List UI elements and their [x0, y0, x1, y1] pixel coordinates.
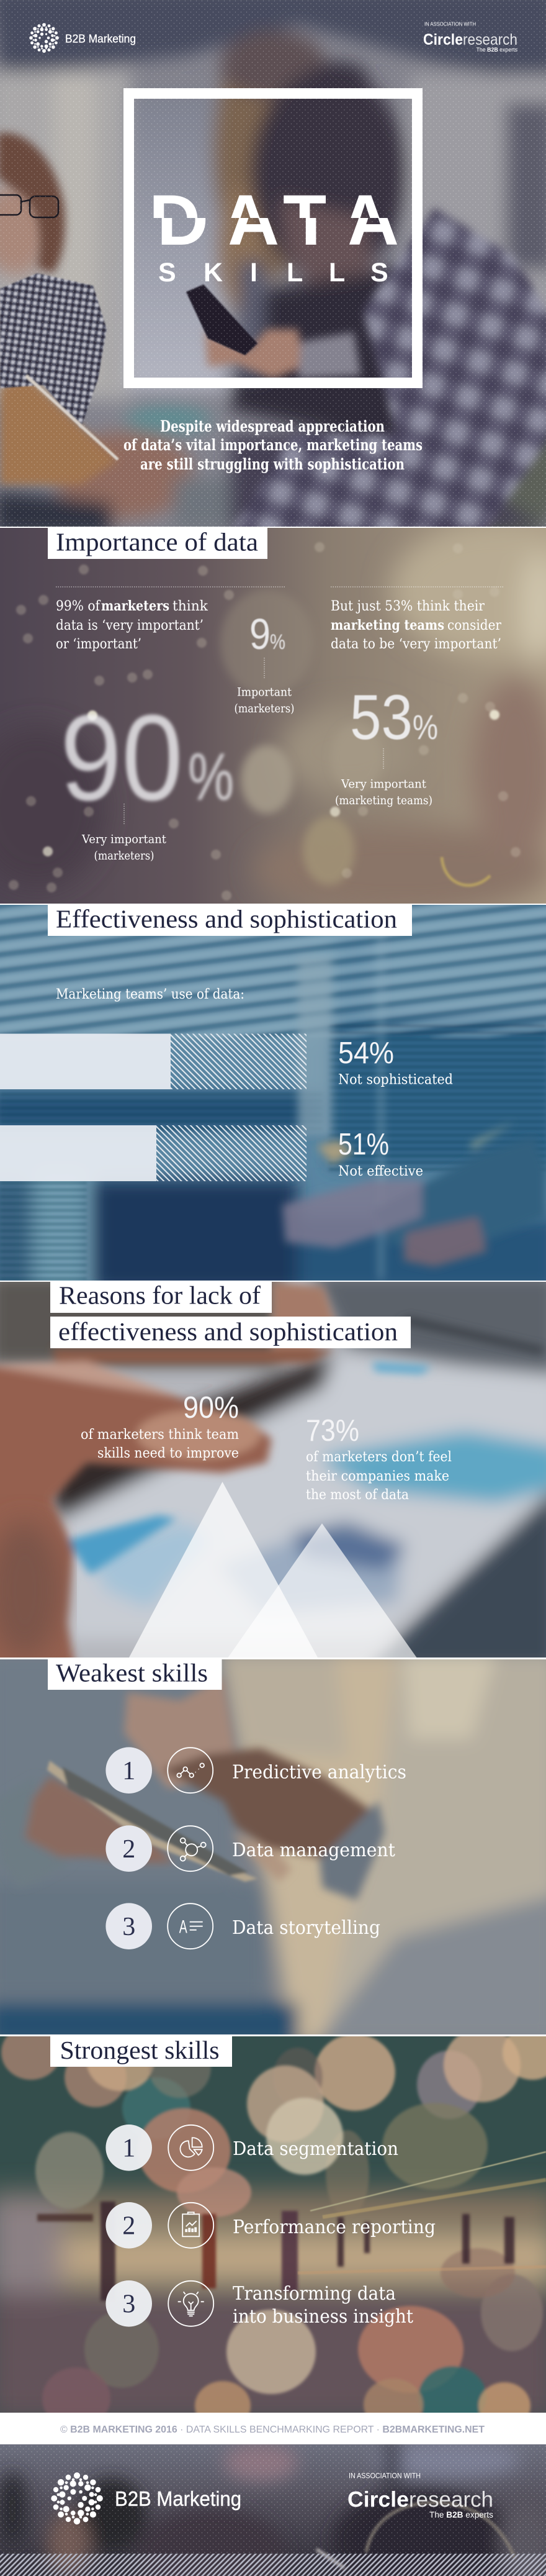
- skill 2: performance reporting: [105, 2202, 436, 2249]
- stat: 53% very important: [335, 682, 438, 807]
- skill 2: performance reporting: Performance reporting: [233, 2216, 436, 2238]
- text: marketing teams: But just 53% think their: [331, 599, 485, 614]
- skill 1: predictive analytics: Predictive analytics: [232, 1761, 406, 1784]
- stat: 9% important: [235, 610, 294, 715]
- finger and tablet background: [0, 1273, 546, 1671]
- intro text: are still struggling with sophistication: [140, 455, 405, 473]
- blinds background: [0, 894, 546, 1292]
- icon: network nodes: [181, 1838, 206, 1861]
- panel: reasons for lack of effectiveness and sophistication: [0, 1273, 546, 1671]
- stat: 73% of marketers: of marketers don’t feel: [306, 1449, 452, 1465]
- heading: Reasons for lack of: [59, 1281, 261, 1309]
- copyright strip: [0, 2413, 546, 2444]
- skill 3: transforming data: 3: [122, 2290, 135, 2319]
- stat: 90% very important: [60, 689, 234, 863]
- stat: 73% of marketers: [306, 1414, 452, 1503]
- stat: 90% very important: Very important: [81, 832, 166, 846]
- heading: Strongest skills: [60, 2036, 220, 2064]
- footer logo: Circle Research: [347, 2472, 493, 2519]
- skill 3: data storytelling: 3: [122, 1913, 135, 1941]
- text: marketing teams: marketing teams: [331, 617, 444, 633]
- skill 2: data management: Data management: [232, 1839, 395, 1861]
- heading: [50, 1281, 411, 1348]
- logo: B2B Marketing: [29, 23, 136, 53]
- bokeh background: [0, 522, 546, 913]
- text: marketers: marketers: [101, 598, 169, 614]
- skill 1: data segmentation: [105, 2125, 398, 2171]
- stat: 53% very important: 53: [350, 682, 413, 753]
- logo: Circle Research: IN ASSOCIATION WITH: [424, 21, 476, 27]
- text: marketers: or ‘important’: [56, 637, 141, 652]
- icon: clipboard chart: [182, 2212, 199, 2236]
- intro text: Despite widespread appreciation: [160, 417, 385, 435]
- stat: 90% of marketers: 90%: [183, 1391, 239, 1425]
- audience background: [0, 2441, 546, 2576]
- stat: 90% very important: (marketers): [94, 849, 154, 863]
- icon: light bulb: [178, 2292, 204, 2316]
- title: DATA: DATA: [149, 181, 391, 260]
- footer logo: B2B Marketing: [51, 2472, 241, 2524]
- stripe band: [0, 2554, 546, 2576]
- footer logo: Circle Research: The B2B experts: [429, 2510, 493, 2519]
- panel: strongest skills: [0, 2025, 546, 2431]
- skill 1: predictive analytics: 1: [122, 1757, 135, 1785]
- icon: text lines: A: [179, 1917, 187, 1938]
- logo: B2B Marketing: B2B Marketing: [65, 32, 136, 45]
- stat: 9% important: Important: [237, 686, 292, 699]
- stat: 90% very important: 90: [60, 689, 183, 826]
- skill 3: transforming data: into business insight: [233, 2306, 413, 2328]
- heading: Importance of data: [56, 528, 258, 556]
- stat: 73% of marketers: the most of data: [306, 1487, 409, 1503]
- skill 2: data management: 2: [122, 1835, 135, 1864]
- text: marketing teams: [331, 587, 504, 652]
- panel: weakest skills: [0, 1652, 546, 2046]
- panel: importance of data: [0, 522, 546, 913]
- panel: effectiveness and sophistication: [0, 894, 546, 1292]
- hands and tablet background: [0, 1652, 546, 2046]
- skill 1: data segmentation: 1: [122, 2134, 135, 2162]
- bar: not sophisticated: Not sophisticated: [338, 1072, 453, 1088]
- skill 1: predictive analytics: [105, 1747, 406, 1794]
- stat: 53% very important: (marketing teams): [335, 794, 432, 807]
- stat: 9% important: %: [270, 630, 285, 654]
- stat: 53% very important: %: [413, 707, 438, 746]
- footer logo: Circle Research: IN ASSOCIATION WITH: [349, 2472, 421, 2480]
- bar: not effective: Not effective: [338, 1164, 423, 1179]
- text: marketers: 99% of: [56, 599, 101, 614]
- footer logo: Circle Research: Circle: [347, 2488, 409, 2511]
- intro text: of data’s vital importance, marketing teams: [123, 436, 423, 454]
- stat: 9% important: 9: [249, 610, 271, 658]
- title: SKILLS: SKILLS: [158, 258, 388, 288]
- footer logo: Circle Research: research: [409, 2488, 493, 2511]
- text: marketers: think: [172, 599, 208, 614]
- icon: pie chart: [180, 2138, 202, 2157]
- stat: 53% very important: Very important: [341, 778, 426, 791]
- stat: 73% of marketers: their companies make: [306, 1469, 449, 1484]
- stat: 90% of marketers: [81, 1391, 239, 1461]
- intro text: [123, 417, 423, 473]
- title: DATA: DATA: [157, 181, 399, 260]
- bar: not effective: 51%: [338, 1128, 389, 1161]
- skill 3: data storytelling: [105, 1903, 380, 1949]
- stat: 90% of marketers: skills need to improve: [97, 1446, 239, 1461]
- triangle chart: [129, 1482, 417, 1658]
- bar: not sophisticated: 54%: [338, 1036, 394, 1070]
- stat: 9% important: (marketers): [235, 702, 294, 715]
- icon: predictive line: [177, 1763, 204, 1777]
- stat: 90% of marketers: of marketers think team: [81, 1427, 239, 1443]
- skill 3: transforming data: [105, 2280, 413, 2328]
- logo: Circle Research: research: [463, 31, 517, 48]
- heading: effectiveness and sophistication: [58, 1317, 398, 1346]
- hero background photo: [0, 0, 546, 553]
- panel: footer: [0, 2441, 546, 2576]
- bar: not sophisticated: [0, 1033, 453, 1089]
- logo: Circle Research: The B2B experts: [477, 47, 517, 53]
- heading: Weakest skills: [56, 1658, 208, 1687]
- icon: text lines: [179, 1917, 203, 1938]
- text: marketing teams: data to be ‘very important’: [331, 637, 501, 652]
- logo: Circle Research: Circle: [423, 31, 463, 48]
- stat: 90% very important: %: [188, 739, 234, 814]
- skill 2: data management: [105, 1825, 395, 1872]
- skill 3: transforming data: Transforming data: [233, 2283, 396, 2305]
- text: marketing teams: consider: [447, 618, 501, 633]
- heading: Effectiveness and sophistication: [56, 904, 397, 933]
- text: marketers: data is ‘very important’: [56, 618, 204, 633]
- bar: not effective: [0, 1125, 423, 1181]
- title frame: [129, 93, 417, 383]
- stat: 73% of marketers: 73%: [306, 1414, 359, 1448]
- skill 3: data storytelling: Data storytelling: [232, 1917, 380, 1939]
- logo: Circle Research: [423, 21, 517, 53]
- panel: hero: [0, 0, 546, 553]
- skill 1: data segmentation: Data segmentation: [233, 2138, 398, 2160]
- copyright strip: © B2B MARKETING 2016 · DATA SKILLS BENCHMARKING REPORT · B2BMARKETING.NET: [60, 2424, 485, 2435]
- city bokeh background: [0, 2025, 546, 2431]
- footer logo: B2B Marketing: B2B Marketing: [115, 2487, 241, 2510]
- bar chart label: Marketing teams’ use of data:: [56, 987, 244, 1002]
- title: DATA: [154, 195, 397, 245]
- skill 2: performance reporting: 2: [122, 2212, 135, 2241]
- text: marketers: [56, 587, 285, 652]
